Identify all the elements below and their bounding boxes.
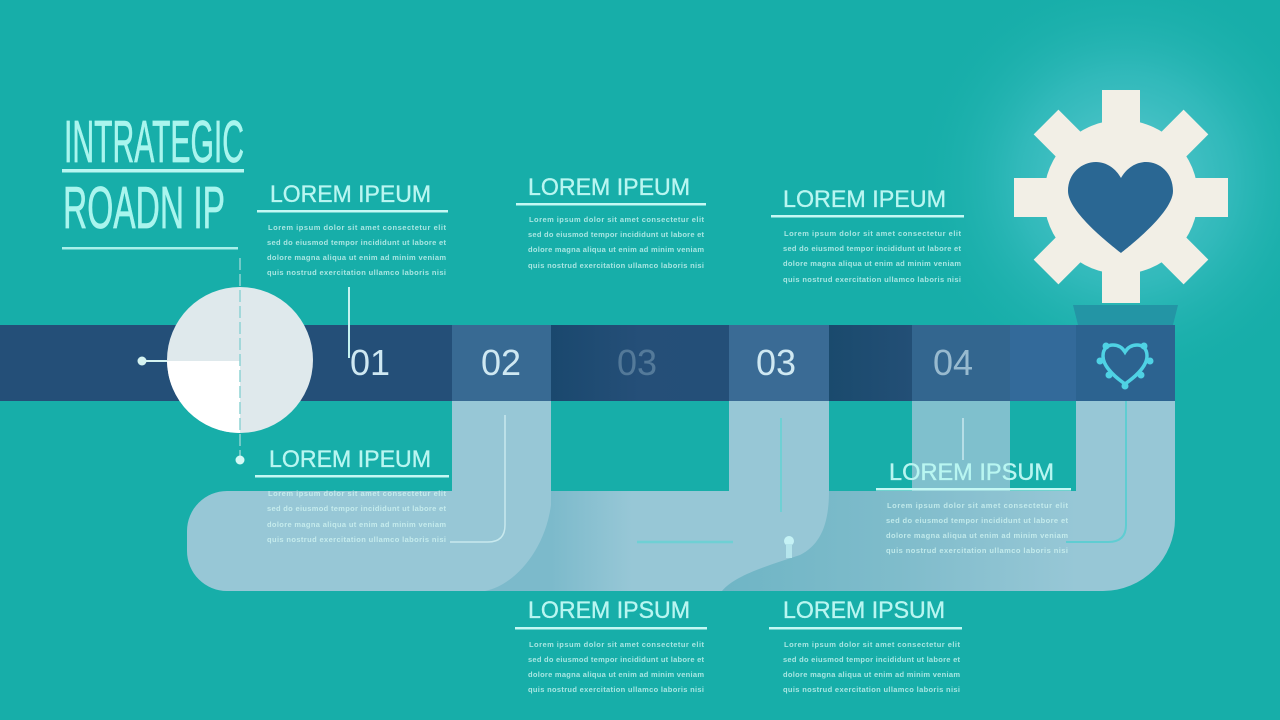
text block 6: LOREM IPSUM (528, 597, 690, 624)
text block 3: quis nostrud exercitation ullamco laboris nisi (783, 275, 961, 284)
text block 3 (771, 186, 964, 284)
step numbers (350, 342, 973, 383)
text block 7: dolore magna aliqua ut enim ad minim veniam (783, 670, 960, 679)
title: ROADN IP (63, 175, 225, 241)
text block 5: sed do eiusmod tempor incididunt ut labore et (886, 516, 1068, 525)
icon: small gear heart (1096, 342, 1154, 390)
text block 2: LOREM IPEUM (528, 174, 690, 201)
text block 7: LOREM IPSUM (783, 597, 945, 624)
text block 4: LOREM IPEUM (269, 446, 431, 473)
text block 4: dolore magna aliqua ut enim ad minim veniam (267, 520, 446, 529)
text block 6: dolore magna aliqua ut enim ad minim veniam (528, 670, 704, 679)
text block 5: quis nostrud exercitation ullamco laboris nisi (886, 546, 1068, 555)
text block 5: LOREM IPSUM (889, 459, 1054, 486)
text block 1: Lorem ipsum dolor sit amet consectetur elit (268, 223, 446, 232)
gear collar (1073, 305, 1178, 325)
text block 3: sed do eiusmod tempor incididunt ut labore et (783, 244, 962, 253)
step numbers: 02 (481, 342, 521, 383)
text block 3: LOREM IPEUM (783, 186, 946, 213)
text block 3: dolore magna aliqua ut enim ad minim veniam (783, 259, 961, 268)
connector lines (349, 287, 1126, 558)
text block 6: sed do eiusmod tempor incididunt ut labore et (528, 655, 704, 664)
step numbers: 04 (933, 342, 973, 383)
text block 2 (516, 174, 706, 270)
title (62, 109, 244, 250)
text block 5 (876, 459, 1071, 555)
step numbers: 01 (350, 342, 390, 383)
text block 7 (769, 597, 962, 694)
text block 2: dolore magna aliqua ut enim ad minim veniam (528, 245, 704, 254)
text block 2: sed do eiusmod tempor incididunt ut labore et (528, 230, 704, 239)
text block 5: Lorem ipsum dolor sit amet consectetur elit (887, 501, 1068, 510)
text block 1: sed do eiusmod tempor incididunt ut labore et (267, 238, 446, 247)
text block 7: quis nostrud exercitation ullamco laboris nisi (783, 685, 960, 694)
gear glow (890, 0, 1280, 420)
step numbers: 03 (756, 342, 796, 383)
circle marker (138, 258, 313, 464)
text block 6 (515, 597, 707, 694)
text block 1: quis nostrud exercitation ullamco laboris nisi (267, 268, 446, 277)
icon: gear with heart (1014, 90, 1228, 303)
text block 2: quis nostrud exercitation ullamco laboris nisi (528, 261, 704, 270)
text block 4: Lorem ipsum dolor sit amet consectetur elit (268, 489, 446, 498)
text block 6: Lorem ipsum dolor sit amet consectetur elit (529, 640, 704, 649)
text block 6: quis nostrud exercitation ullamco laboris nisi (528, 685, 704, 694)
text block 4 (255, 446, 449, 544)
text block 4: sed do eiusmod tempor incididunt ut labore et (267, 504, 446, 513)
roadmap pipes (187, 401, 1175, 591)
timeline bar (0, 325, 1175, 401)
text block 7: Lorem ipsum dolor sit amet consectetur elit (784, 640, 960, 649)
text block 4: quis nostrud exercitation ullamco laboris nisi (267, 535, 446, 544)
text block 1: dolore magna aliqua ut enim ad minim veniam (267, 253, 446, 262)
text block 1 (257, 181, 448, 277)
text block 3: Lorem ipsum dolor sit amet consectetur elit (784, 229, 962, 238)
text block 5: dolore magna aliqua ut enim ad minim veniam (886, 531, 1068, 540)
step numbers: 03 (617, 342, 657, 383)
title: INTRATEGIC (64, 109, 244, 175)
text block 1: LOREM IPEUM (270, 181, 431, 208)
text block 2: Lorem ipsum dolor sit amet consectetur elit (529, 215, 704, 224)
text block 7: sed do eiusmod tempor incididunt ut labore et (783, 655, 960, 664)
